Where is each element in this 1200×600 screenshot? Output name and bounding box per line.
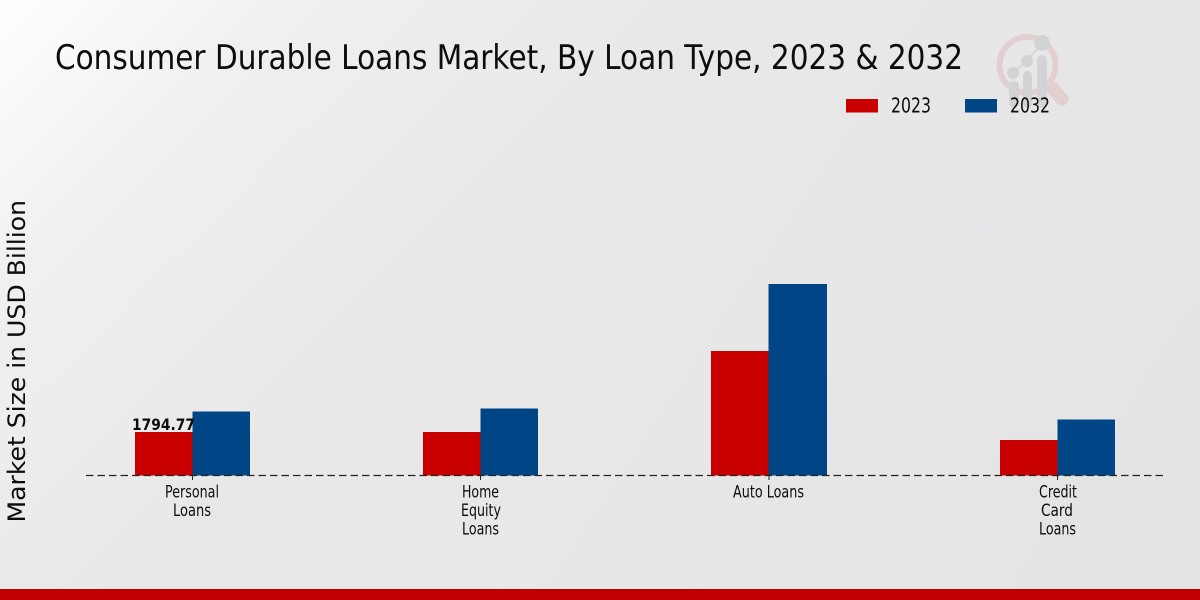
- footer bar: [0, 589, 1200, 600]
- label: Home Equity Loans: [461, 482, 501, 538]
- legend item: 2023: 2023: [891, 94, 931, 118]
- legend: [846, 94, 1050, 118]
- label: Home Equity Loans: Equity: [461, 501, 501, 520]
- label: Personal Loans: [165, 482, 219, 520]
- label: Credit Card Loans: Loans: [1039, 520, 1076, 538]
- label: Home Equity Loans: Loans: [462, 520, 499, 538]
- legend item: 2032: [965, 94, 1050, 118]
- label: Credit Card Loans: [1039, 482, 1077, 538]
- icon: watermark logo: [1000, 35, 1062, 108]
- legend item: 2032: 2032: [1010, 94, 1050, 118]
- label: Credit Card Loans: Credit: [1039, 482, 1077, 502]
- title: Consumer Durable Loans Market, By Loan Type, 2023 & 2032: [55, 38, 963, 78]
- x axis labels: [165, 482, 1077, 538]
- label: Auto Loans: Auto Loans: [733, 482, 804, 502]
- label: Credit Card Loans: Card: [1041, 501, 1073, 520]
- label: Personal Loans: Loans: [173, 501, 211, 520]
- legend item: 2023: [846, 94, 931, 118]
- group: Auto Loans: [711, 284, 827, 476]
- label: Home Equity Loans: Home: [462, 482, 499, 502]
- bar chart: [86, 284, 1164, 480]
- group: Credit Card Loans: [1000, 420, 1115, 476]
- y axis label: Market Size in USD Billion: [3, 200, 31, 522]
- group: Personal Loans: [132, 412, 250, 476]
- label: Personal Loans: Personal: [165, 482, 219, 502]
- group: Personal Loans: 1794.77: [132, 415, 195, 434]
- group: Home Equity Loans: [423, 408, 538, 476]
